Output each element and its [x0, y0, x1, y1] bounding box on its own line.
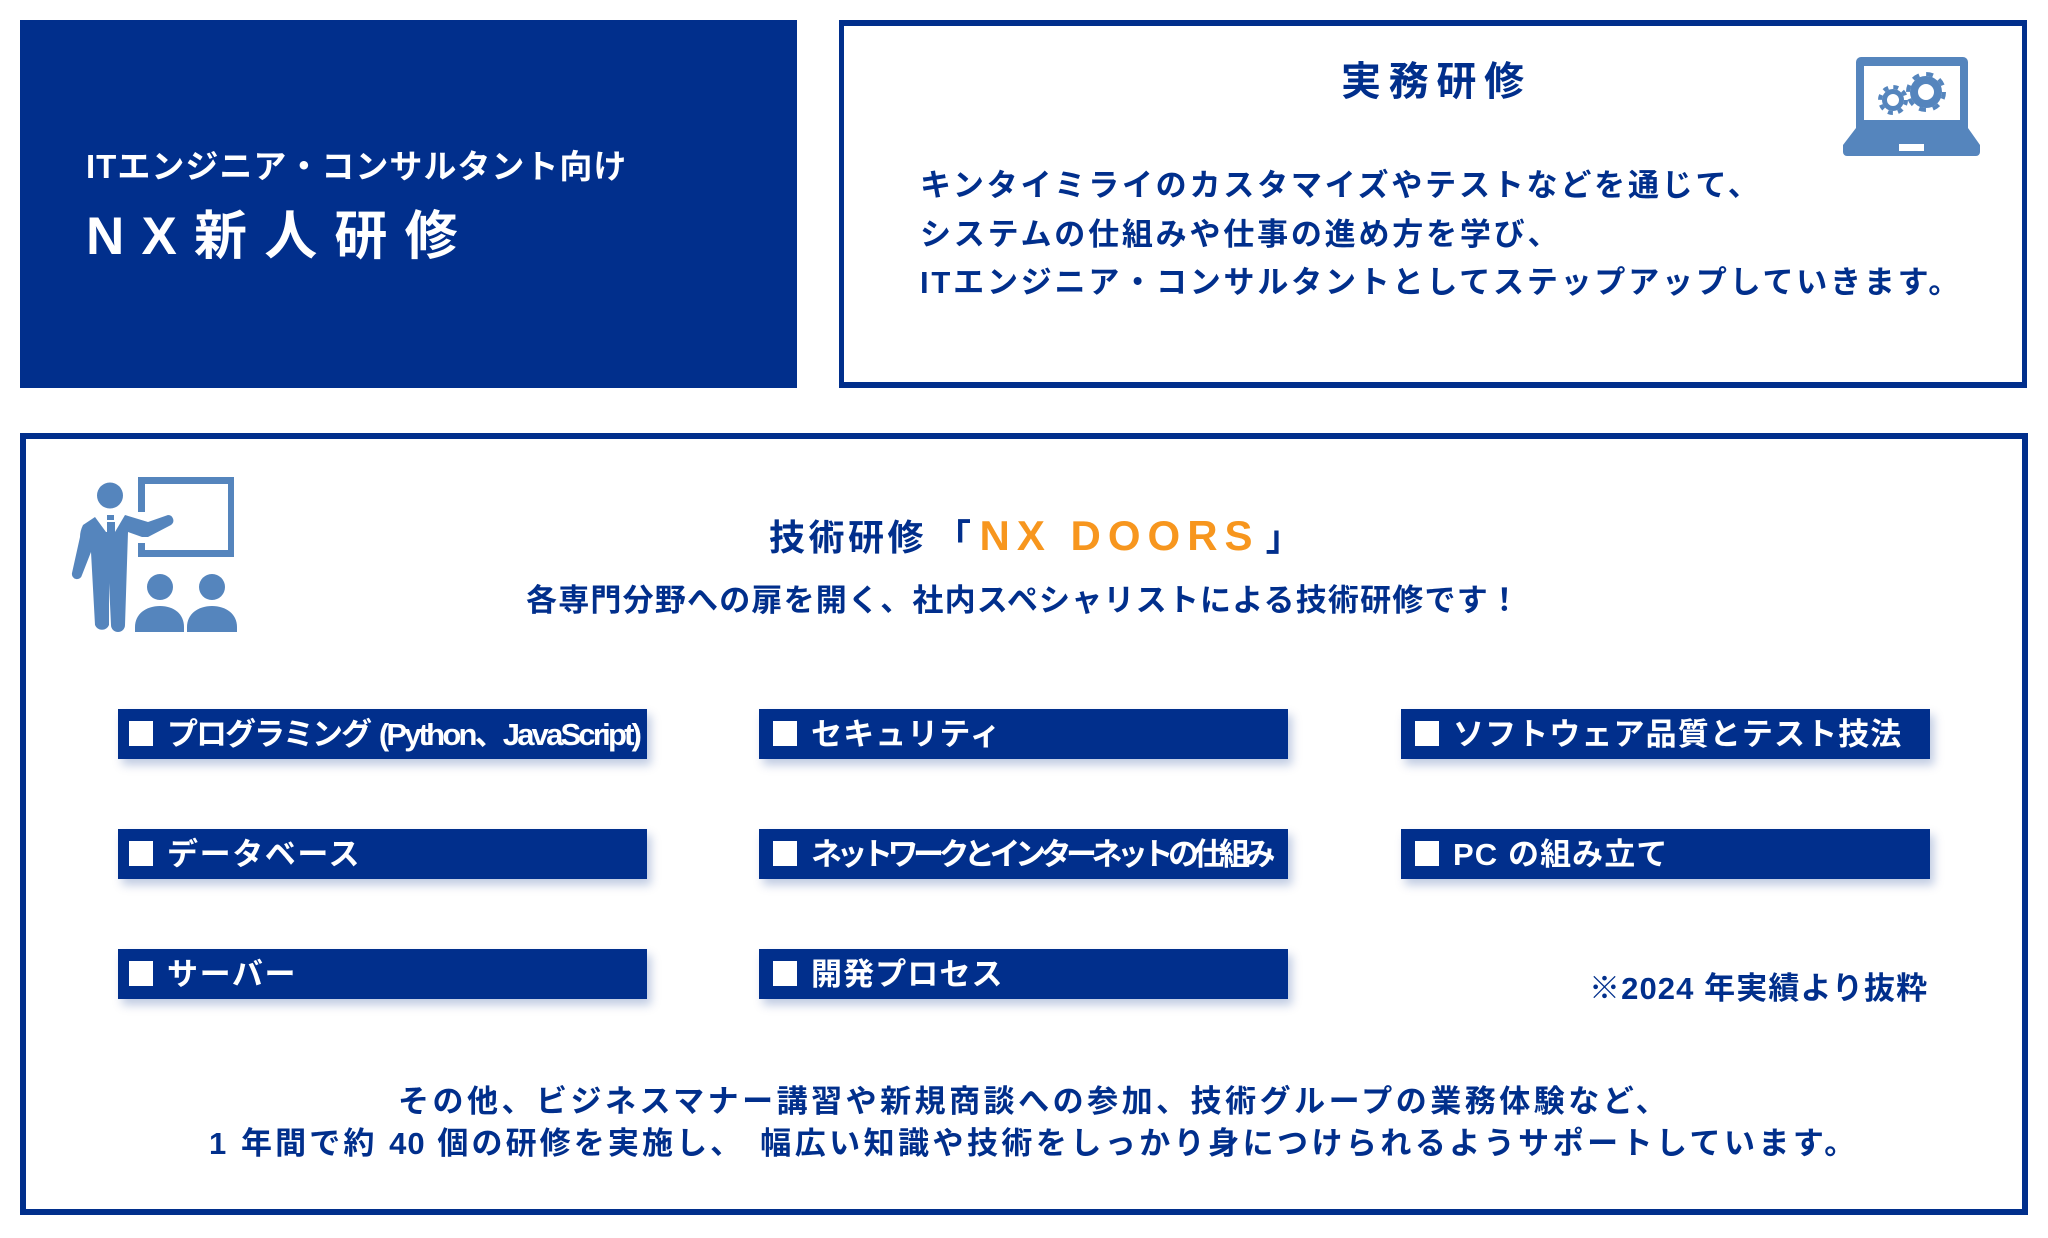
text block: practical training description — [920, 168, 1962, 300]
item: software quality — [1401, 709, 1930, 759]
item: PC assembly: PC の組み立て — [1453, 837, 1668, 872]
text block: practical training description: ITエンジニア・コンサルタントとしてステップアップしていきます。 — [920, 265, 1962, 300]
subheading: technical training summary: 各専門分野への扉を開く、社内スペシャリストによる技術研修です！ — [526, 583, 1521, 618]
item: server: サーバー — [167, 957, 297, 992]
text block: closing message: 1 年間で約 40 個の研修を実施し、 幅広い知識や技術をしっかり身につけられるようサポートしています。 — [209, 1126, 1859, 1161]
subtitle: target audience: ITエンジニア・コンサルタント向け — [86, 148, 627, 185]
item: security: セキュリティ — [811, 717, 1002, 752]
icon: laptop with gears — [1843, 57, 1980, 156]
item: programming: プログラミング (Python、JavaScript) — [167, 717, 639, 752]
item: database: データベース — [167, 837, 361, 872]
note: 2024 results: ※2024 年実績より抜粋 — [1589, 971, 1928, 1006]
item: development process — [759, 949, 1288, 999]
icon: presenter and audience — [72, 477, 237, 632]
item: development process: 開発プロセス — [811, 957, 1004, 992]
text block: practical training description: システムの仕組みや仕事の進め方を学び、 — [920, 216, 1561, 252]
heading: NX DOORS: 技術研修「NX DOORS」 — [769, 512, 1305, 559]
item: software quality: ソフトウェア品質とテスト技法 — [1453, 717, 1902, 752]
item: PC assembly — [1401, 829, 1930, 879]
item: security — [759, 709, 1288, 759]
panel: practical training — [839, 20, 2027, 388]
item: network: ネットワークとインターネットの仕組み — [811, 837, 1270, 872]
panel: title — [20, 20, 797, 388]
item: network — [759, 829, 1288, 879]
text block: closing message — [209, 1084, 1859, 1161]
text block: practical training description: キンタイミライのカスタマイズやテストなどを通じて、 — [920, 168, 1762, 203]
text block: closing message: その他、ビジネスマナー講習や新規商談への参加、技術グループの業務体験など、 — [398, 1084, 1670, 1119]
panel: technical training — [20, 433, 2028, 1215]
title: NX new employee training: NX新人研修 — [86, 207, 475, 266]
item: server — [118, 949, 647, 999]
item: programming — [118, 709, 647, 759]
item: database — [118, 829, 647, 879]
heading: practical training: 実務研修 — [1341, 60, 1532, 104]
